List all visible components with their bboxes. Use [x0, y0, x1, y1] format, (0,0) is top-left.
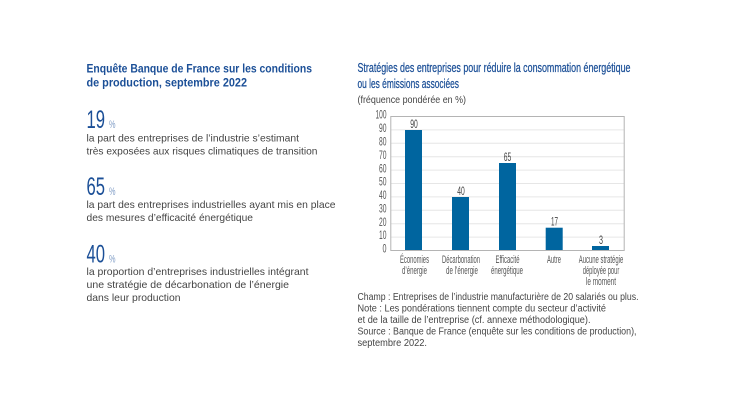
bar: Efficacité énergétique, 65: énergétique	[491, 265, 523, 277]
bar: Décarbonation de l'énergie, 40: 40	[457, 184, 465, 198]
bar: Économies d'énergie, 90: 90	[410, 117, 418, 131]
key figure: 40 %: dans leur production	[86, 292, 181, 304]
key figure: 19 %: %	[109, 119, 116, 131]
bar: Décarbonation de l'énergie, 40	[442, 184, 480, 277]
y axis labels: 20	[379, 215, 387, 229]
key figure: 65 %	[86, 173, 336, 224]
bar: Efficacité énergétique, 65: Efficacité	[496, 254, 520, 266]
key figure: 40 %: la proportion d’entreprises industrielles intégrant	[86, 266, 309, 278]
y axis labels: 30	[379, 202, 387, 216]
footnotes: scope, note and source: Note : Les pondérations tiennent compte du secteur d’activité	[358, 304, 606, 314]
y axis labels: 100	[376, 108, 387, 122]
key figure: 65 %: des mesures d’efficacité énergétique	[86, 212, 253, 224]
key figure: 40 %: une stratégie de décarbonation de l’énergie	[86, 279, 289, 291]
key figure: 19 %: 19	[86, 106, 105, 134]
y axis labels: 80	[379, 134, 387, 148]
y axis labels: 0	[382, 242, 387, 256]
y axis labels: 90	[379, 121, 387, 135]
footnotes: scope, note and source: Champ : Entreprises de l’industrie manufacturière de 20 salariés ou plus.	[358, 292, 638, 303]
footnotes: scope, note and source	[358, 292, 638, 349]
panel: key figures	[86, 62, 336, 304]
key figure: 19 %: très exposées aux risques climatiques de transition	[86, 146, 318, 158]
y axis labels: 10	[379, 228, 387, 242]
bar: Aucune stratégie déployée pour le moment, 3	[579, 233, 623, 288]
bar: Aucune stratégie déployée pour le moment, 3: déployée pour	[583, 265, 619, 277]
chart title: ou les émissions associées	[358, 76, 459, 91]
bar: Autre, 17: Autre	[547, 254, 561, 266]
key figure: 40 %: 40	[86, 240, 105, 268]
bar: Économies d'énergie, 90	[400, 117, 429, 277]
bar: Autre, 17	[546, 214, 563, 266]
y axis labels: 50	[379, 174, 387, 188]
bar: Autre, 17: 17	[551, 214, 558, 228]
bar: Efficacité énergétique, 65	[491, 150, 523, 277]
chart unit subtitle: (fréquence pondérée en %)	[358, 95, 466, 106]
key figure: 19 %	[86, 106, 318, 158]
heading: survey title	[86, 62, 312, 90]
bar: Efficacité énergétique, 65: 65	[504, 150, 511, 164]
y axis labels	[376, 108, 387, 256]
bar: Aucune stratégie déployée pour le moment, 3: 3	[599, 233, 603, 247]
footnotes: scope, note and source: Source : Banque de France (enquête sur les conditions de production),	[358, 326, 636, 338]
bar: Aucune stratégie déployée pour le moment, 3: Aucune stratégie	[579, 254, 623, 266]
key figure: 65 %: la part des entreprises industrielles ayant mis en place	[86, 199, 336, 211]
heading: survey title: de production, septembre 2022	[86, 76, 247, 90]
footnotes: scope, note and source: et de la taille de l’entreprise (cf. annexe méthodologique).	[358, 315, 590, 326]
key figure: 65 %: 65	[86, 173, 105, 201]
y axis labels: 60	[379, 162, 387, 176]
bar: Décarbonation de l'énergie, 40: de l’énergie	[446, 265, 478, 277]
bar: Décarbonation de l'énergie, 40: Décarbonation	[442, 254, 480, 266]
footnotes: scope, note and source: septembre 2022.	[358, 338, 427, 349]
key figure: 40 %	[86, 240, 309, 304]
bar chart	[376, 108, 624, 288]
y axis labels: 70	[379, 148, 387, 162]
bar: Aucune stratégie déployée pour le moment, 3: le moment	[586, 276, 616, 288]
panel: chart	[358, 60, 638, 349]
heading: survey title: Enquête Banque de France sur les conditions	[86, 62, 312, 76]
y axis labels: 40	[379, 188, 387, 202]
bar: Économies d'énergie, 90: d’énergie	[402, 265, 427, 277]
key figure: 40 %: %	[109, 254, 116, 266]
key figure: 65 %: %	[109, 186, 116, 198]
key figure: 19 %: la part des entreprises de l’industrie s’estimant	[86, 132, 299, 144]
chart title	[358, 60, 630, 91]
bar: Économies d'énergie, 90: Économies	[400, 253, 429, 266]
